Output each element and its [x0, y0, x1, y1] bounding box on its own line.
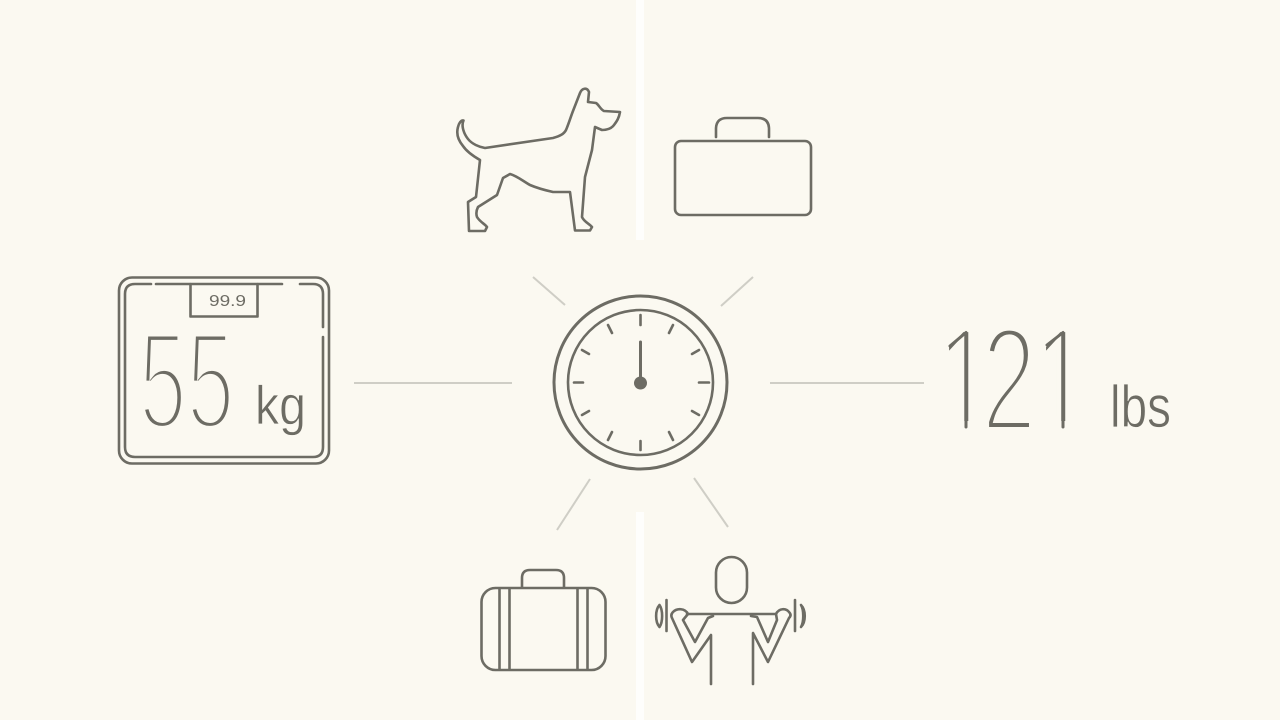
- connector: upper right ray: [721, 277, 753, 306]
- connector: lower left ray: [557, 479, 590, 530]
- left plates: [656, 600, 666, 631]
- unit kg: kg: [255, 374, 306, 436]
- clock hand: [639, 342, 642, 380]
- scale body: [119, 278, 329, 464]
- head: [716, 557, 747, 603]
- weight number 121 lbs: [937, 296, 1171, 462]
- bathroom scale showing 55 kg: [119, 278, 329, 464]
- weight number 55: 55: [139, 304, 234, 458]
- scale display: [190, 284, 258, 316]
- clock hub: [634, 376, 647, 390]
- connector: right: [770, 382, 924, 384]
- hour ticks: [574, 315, 709, 450]
- connector: lower right ray: [694, 478, 728, 527]
- right arm and torso: [751, 609, 790, 684]
- connector: upper left ray: [533, 277, 565, 305]
- clock dial: [554, 296, 727, 469]
- number 121: 121: [937, 296, 1089, 462]
- connector: left: [354, 382, 512, 384]
- icon: weightlifter: [656, 557, 805, 684]
- display reading: 99.9: [209, 293, 246, 310]
- right plates: [795, 600, 805, 631]
- barbell: [687, 613, 776, 615]
- left arm and torso: [671, 609, 713, 684]
- unit lbs: lbs: [1110, 374, 1171, 440]
- icon: briefcase top: [675, 118, 811, 215]
- icon: dog outline: [457, 89, 620, 231]
- icon: suitcase bottom: [482, 570, 606, 670]
